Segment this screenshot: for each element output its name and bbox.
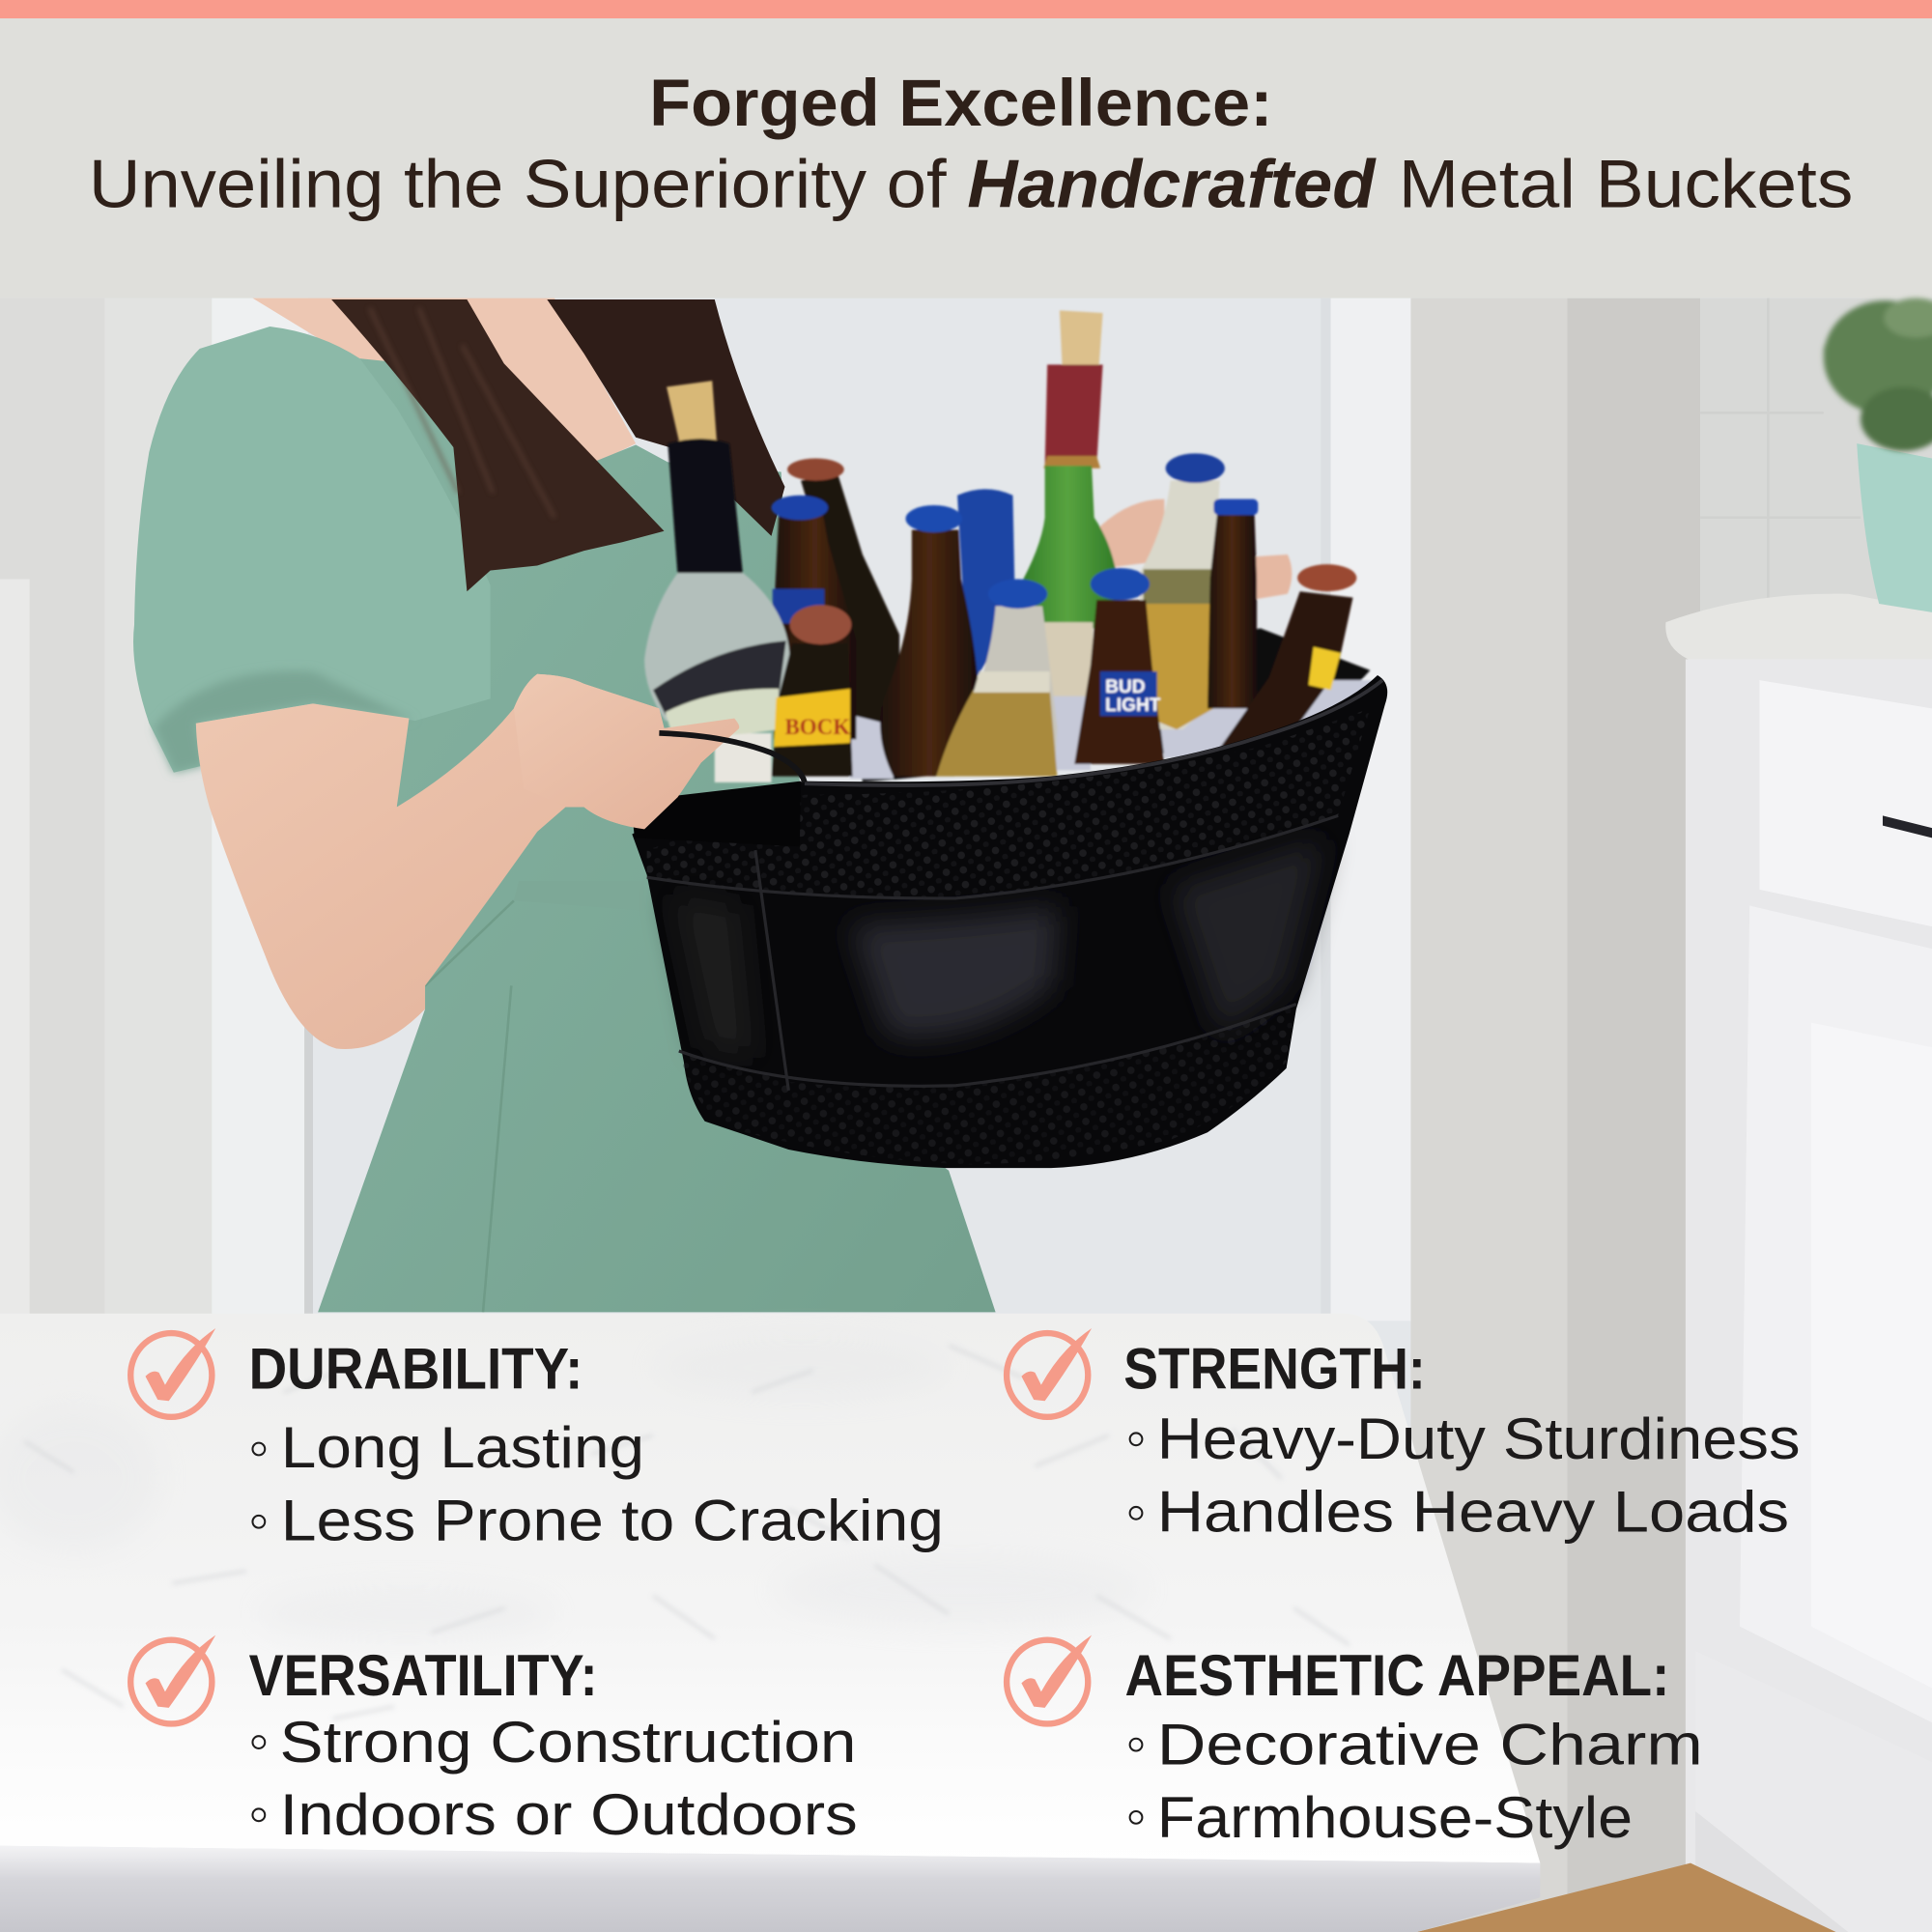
right hand behind [1096, 499, 1292, 600]
hair front [331, 299, 665, 591]
text: Handles Heavy Loads [1157, 1479, 1789, 1544]
reflections [850, 906, 1060, 1037]
panel: aesthetic appeal [1007, 1635, 1703, 1850]
skirt fold [425, 900, 514, 1312]
heading: AESTHETIC APPEAL: [1125, 1643, 1669, 1708]
wine clear bottle [644, 381, 790, 735]
heading: STRENGTH: [1123, 1336, 1426, 1401]
rim highlight [805, 680, 1382, 785]
panel: durability [130, 1328, 944, 1552]
panel: strength [1007, 1328, 1801, 1544]
lower hammered band [679, 1005, 1296, 1164]
top coral bar [0, 0, 1932, 18]
title line 2 start: Unveiling the Superiority of [89, 145, 947, 221]
hair right lock [547, 299, 784, 536]
clear bottle blue cap right [1140, 453, 1225, 729]
text: Less Prone to Cracking [281, 1488, 944, 1552]
icon: check mark [1007, 1635, 1092, 1723]
ice [850, 666, 1374, 779]
blue can bottle [957, 489, 1015, 690]
bud light bottle: LIGHT [1105, 696, 1161, 716]
text: Strong Construction [280, 1710, 856, 1775]
bock bottle front: BOCK [784, 715, 850, 739]
bullet [252, 1443, 265, 1455]
bullet [1130, 1739, 1142, 1750]
upper hammered band [647, 708, 1370, 898]
heading: VERSATILITY: [249, 1643, 598, 1708]
angled copper bottle [1220, 564, 1356, 748]
text: Decorative Charm [1157, 1713, 1703, 1777]
marble veins [25, 1346, 1350, 1719]
bullet [1130, 1811, 1142, 1824]
green wine bottle [1016, 310, 1119, 696]
handle bracket [631, 781, 801, 846]
panel: black metal bucket [631, 675, 1387, 1168]
seam lines [647, 815, 1338, 1091]
handle wire over hand [659, 733, 805, 782]
title line 1: Forged Excellence: [649, 66, 1273, 140]
text: Indoors or Outdoors [280, 1782, 858, 1847]
dress torso and skirt [318, 358, 996, 1312]
title line 2 end: Metal Buckets [1399, 145, 1853, 221]
bullet [1130, 1507, 1142, 1520]
hair strands [370, 308, 554, 518]
waist band [514, 881, 644, 911]
icon: potted plant [1824, 298, 1932, 612]
bullet [1130, 1433, 1142, 1445]
brown bottle blue cap [880, 529, 980, 777]
clear bottle front [936, 579, 1057, 777]
bullet [252, 1808, 265, 1821]
icon: check mark [130, 1328, 215, 1417]
text: Long Lasting [281, 1415, 644, 1480]
marble blotches [0, 1337, 1146, 1641]
white label behind [715, 733, 771, 782]
text: Farmhouse-Style [1157, 1785, 1633, 1850]
panel: marble countertop [0, 1314, 1540, 1932]
panel: versatility [130, 1635, 858, 1847]
icon: check mark [130, 1635, 215, 1723]
header panel [0, 18, 1932, 298]
bullet [252, 1516, 265, 1528]
icon: hand gripping handle [514, 674, 739, 829]
bud light bottle: BUD [1105, 677, 1146, 697]
text: Heavy-Duty Sturdiness [1157, 1406, 1801, 1471]
heading: DURABILITY: [249, 1336, 582, 1401]
title [89, 66, 1853, 221]
title line 2 emphasis: Handcrafted [967, 145, 1378, 221]
panel: bottles in the bucket [644, 310, 1374, 782]
bud light bottle [1074, 568, 1164, 764]
bud bottle back [774, 515, 856, 739]
sleeve [133, 327, 491, 773]
bottle: copper cap back [801, 474, 899, 727]
panel: woman in green dress [133, 298, 996, 1312]
neck and chest skin [252, 298, 636, 462]
icon: check mark [1007, 1328, 1092, 1417]
bock bottle front [771, 605, 853, 777]
sleeve shade [154, 671, 415, 773]
arm [196, 674, 739, 1049]
dark bottle blue cap right [1208, 511, 1257, 708]
bullet [252, 1736, 265, 1748]
bucket inner back [850, 629, 1370, 782]
